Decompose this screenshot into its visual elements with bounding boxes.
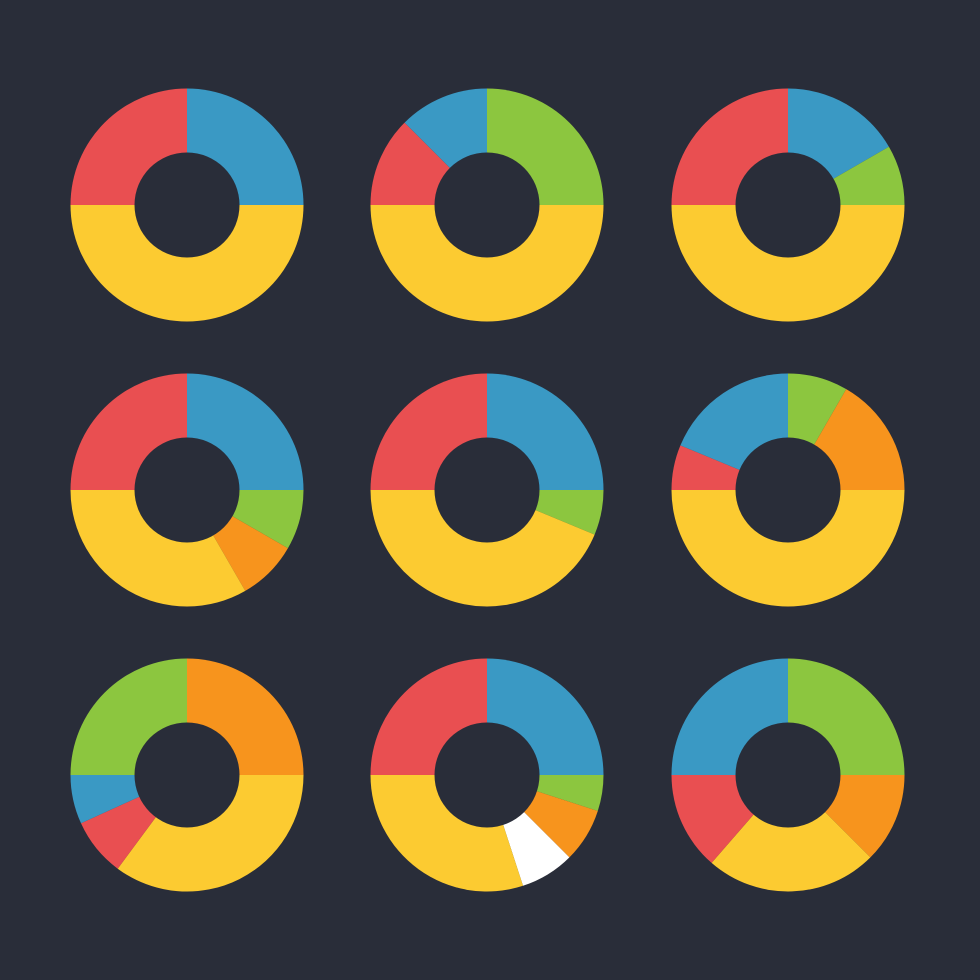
donut chart row 3 column 1 [70, 658, 304, 892]
donut chart row 1 column 2 [370, 88, 604, 322]
donut chart row 2 column 2 [370, 374, 604, 606]
donut chart row 3 column 2 [370, 658, 604, 892]
donut chart row 1 column 1 [70, 88, 304, 322]
donut chart row 1 column 3 [672, 88, 904, 322]
donut chart row 2 column 3 [672, 374, 904, 606]
donut chart row 2 column 1 [70, 374, 304, 607]
donut chart row 3 column 3 [672, 658, 904, 891]
